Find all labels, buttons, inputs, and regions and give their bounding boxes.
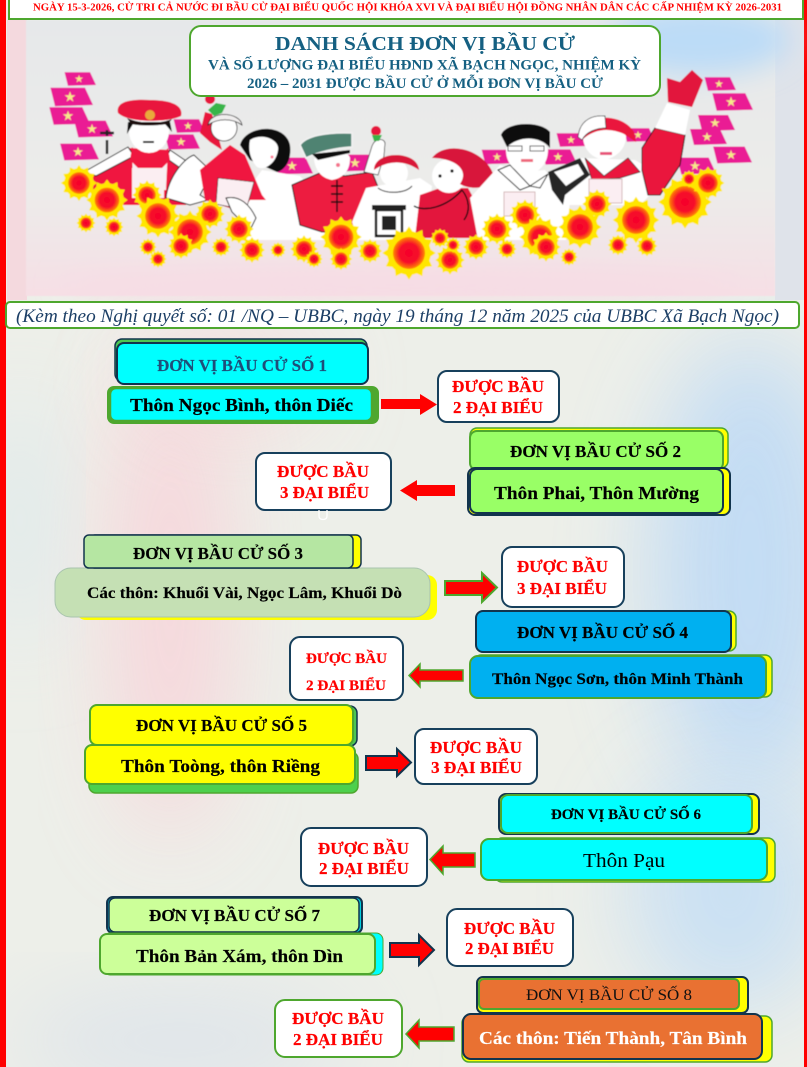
title panel	[190, 26, 660, 96]
small mark under box	[319, 510, 327, 520]
result box: 2 delegates: 2 ĐẠI BIỂU	[306, 676, 386, 694]
arrow right	[381, 394, 437, 415]
result box: 3 delegates: 3 ĐẠI BIỂU	[517, 579, 607, 598]
figure: man with green hat	[292, 126, 385, 232]
arrow left	[409, 664, 463, 687]
unit 6 villages	[481, 838, 775, 882]
unit 2 villages: Thôn Phai, Thôn Mường	[494, 483, 699, 503]
result box: 2 delegates: ĐƯỢC BẦU	[464, 919, 555, 938]
title panel: VÀ SỐ LƯỢNG ĐẠI BIỂU HĐND XÃ BẠCH NGỌC, NHIỆM KỲ	[208, 56, 641, 74]
result box: 2 delegates: 2 ĐẠI BIỂU	[319, 859, 409, 878]
arrow right	[390, 935, 434, 965]
figure: soldier	[84, 100, 192, 205]
result box: 3 delegates: ĐƯỢC BẦU	[430, 738, 522, 757]
unit 4 villages: Thôn Ngọc Sơn, thôn Minh Thành	[492, 671, 743, 688]
unit 5 header	[90, 705, 357, 746]
result box: 3 delegates: ĐƯỢC BẦU	[517, 557, 608, 576]
unit 7	[100, 897, 573, 975]
result box: 2 delegates: 2 ĐẠI BIỂU	[293, 1030, 383, 1049]
title panel: DANH SÁCH ĐƠN VỊ BẦU CỬ	[275, 31, 575, 55]
unit 8 villages: Các thôn: Tiến Thành, Tân Bình	[479, 1028, 747, 1048]
result box: 3 delegates: ĐƯỢC BẦU	[277, 462, 369, 481]
unit 2 header	[470, 428, 728, 470]
unit 7 header: ĐƠN VỊ BẦU CỬ SỐ 7	[149, 905, 320, 925]
result box: 2 delegates	[301, 828, 427, 886]
unit 5 villages: Thôn Toòng, thôn Riềng	[121, 756, 320, 776]
unit 7 villages	[100, 933, 383, 975]
result box: 3 delegates	[502, 547, 624, 607]
unit 8 villages	[462, 1014, 772, 1062]
arrow right	[366, 749, 411, 776]
unit 3 header	[84, 535, 361, 568]
unit 6 header	[499, 794, 759, 834]
arrow left	[406, 1020, 454, 1048]
unit 3 header: ĐƠN VỊ BẦU CỬ SỐ 3	[133, 543, 303, 563]
resolution note: (Kèm theo Nghị quyết số: 01 /NQ – UBBC, ngày 19 tháng 12 năm 2025 của UBBC Xã Bạch Ngọc)	[16, 306, 779, 327]
unit 8 header	[477, 977, 748, 1013]
unit 3 villages: Các thôn: Khuổi Vài, Ngọc Lâm, Khuổi Dò	[87, 585, 402, 602]
unit 3	[55, 535, 624, 620]
result box: 3 delegates	[256, 453, 391, 510]
result box: 2 delegates: 2 ĐẠI BIỂU	[453, 398, 543, 417]
unit 1 villages: Thôn Ngọc Bình, thôn Diếc	[130, 395, 353, 415]
unit 6 villages: Thôn Pạu	[583, 850, 665, 872]
figure: man with glasses	[470, 124, 570, 240]
figure: child and mother in red hat	[352, 148, 494, 240]
unit 6 header: ĐƠN VỊ BẦU CỬ SỐ 6	[551, 805, 701, 823]
flags	[49, 72, 753, 174]
arrow left	[400, 480, 455, 501]
unit 1	[108, 339, 559, 423]
top banner: NGÀY 15-3-2026, CỬ TRI CẢ NƯỚC ĐI BẦU CỬ ĐẠI BIỂU QUỐC HỘI KHÓA XVI VÀ ĐẠI BIỂU HỘI ĐỒNG NHÂN DÂN CÁC CẤP NHIỆM KỲ 2026-2031	[33, 0, 782, 14]
result box: 2 delegates: ĐƯỢC BẦU	[306, 650, 387, 667]
result box: 3 delegates: 3 ĐẠI BIỂU	[431, 758, 522, 777]
arrow right	[445, 573, 497, 602]
unit 3 villages	[55, 568, 437, 620]
result box: 2 delegates: ĐƯỢC BẦU	[452, 377, 544, 396]
unit 5 villages	[85, 745, 358, 793]
result box: 2 delegates: ĐƯỢC BẦU	[292, 1009, 384, 1028]
result box: 2 delegates: ĐƯỢC BẦU	[318, 839, 409, 858]
unit 2 villages	[468, 468, 730, 515]
unit 5 header: ĐƠN VỊ BẦU CỬ SỐ 5	[136, 715, 307, 735]
unit 8	[275, 977, 772, 1062]
result box: 2 delegates	[438, 371, 559, 422]
unit 2	[256, 428, 730, 520]
hero illustration: voters, flags and sunflowers	[26, 5, 790, 299]
arrow left	[430, 846, 475, 874]
result box: 3 delegates: 3 ĐẠI BIỂU	[280, 483, 369, 502]
sunflowers	[61, 165, 724, 280]
unit 8 header: ĐƠN VỊ BẦU CỬ SỐ 8	[526, 985, 692, 1004]
title panel: 2026 – 2031 ĐƯỢC BẦU CỬ Ở MỖI ĐƠN VỊ BẦU CỬ	[247, 74, 603, 92]
unit 1 header: ĐƠN VỊ BẦU CỬ SỐ 1	[157, 355, 327, 375]
unit 4	[290, 611, 772, 700]
result box: 2 delegates	[290, 637, 403, 700]
unit 4 header: ĐƠN VỊ BẦU CỬ SỐ 4	[517, 622, 688, 642]
result box: 3 delegates	[415, 729, 537, 784]
unit 4 villages	[470, 655, 772, 698]
result box: 2 delegates	[275, 1000, 402, 1057]
unit 1 header	[115, 339, 368, 384]
figure: woman carrying child	[166, 94, 325, 240]
unit 5	[85, 705, 537, 793]
result box: 2 delegates	[447, 909, 573, 966]
unit 2 header: ĐƠN VỊ BẦU CỬ SỐ 2	[510, 441, 681, 461]
unit 4 header	[476, 611, 736, 652]
unit 6	[301, 794, 775, 886]
result box: 2 delegates: 2 ĐẠI BIỂU	[465, 939, 554, 958]
figure: worker raising hand	[548, 70, 703, 205]
unit 7 villages: Thôn Bản Xám, thôn Dìn	[136, 946, 343, 966]
top banner	[9, 0, 803, 19]
unit 1 villages	[108, 387, 378, 423]
unit 7 header	[107, 897, 362, 933]
